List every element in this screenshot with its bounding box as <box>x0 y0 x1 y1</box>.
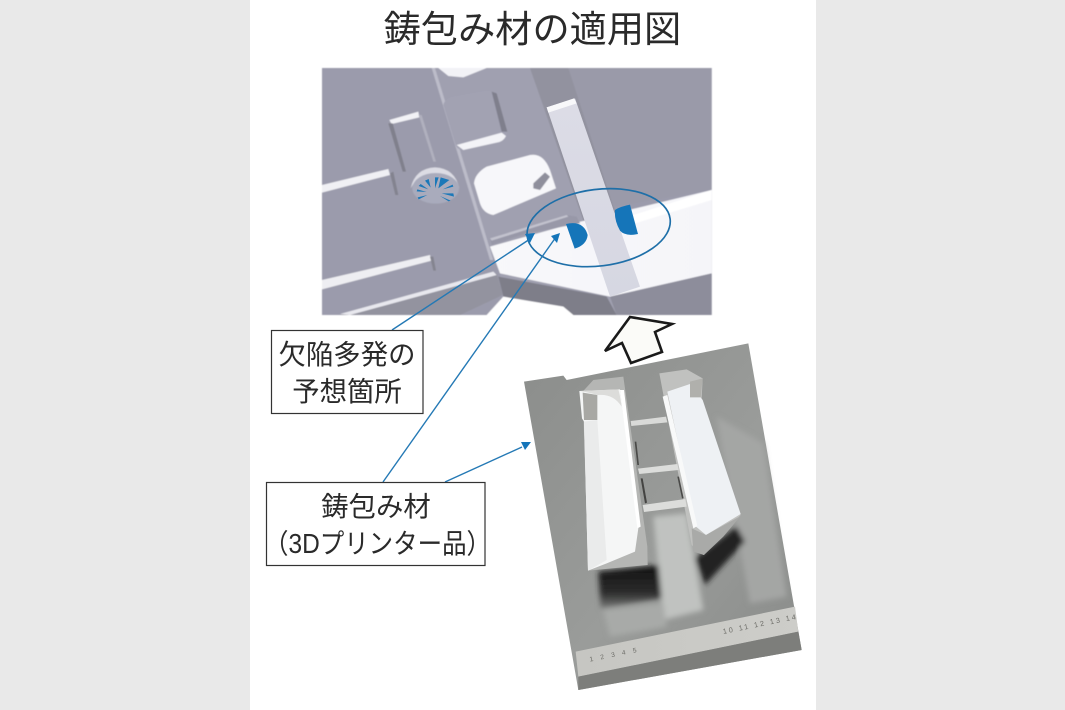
arrow: defect label to casting <box>392 233 535 330</box>
label: chill insert 3D printed: 鋳包み材 <box>321 491 431 522</box>
arrow: chill insert label to casting <box>383 233 560 482</box>
white page panel <box>250 0 816 710</box>
label: predicted defect location: 予想箇所 <box>292 376 402 407</box>
steel ruler: 10 11 12 13 14 <box>722 612 799 636</box>
photo: 3D printed chill inserts on steel plate <box>524 343 802 690</box>
label: predicted defect location <box>272 330 423 414</box>
main vertical strip <box>547 98 640 297</box>
steel ruler <box>576 607 802 690</box>
icon: blue defect area centre <box>566 223 588 249</box>
arrow: chill insert label to photo <box>445 442 531 482</box>
arrow: outlined up arrow <box>605 317 672 363</box>
panel: CAD view of casting <box>322 68 712 315</box>
ladder rungs <box>631 417 687 512</box>
icon: vent fan sectors <box>417 177 454 201</box>
label: chill insert 3D printed <box>264 482 491 566</box>
left insert <box>579 377 648 571</box>
plate highlights and shadows <box>598 417 787 637</box>
ellipse highlight <box>523 181 675 274</box>
title: 鋳包み材の適用図 <box>384 8 681 50</box>
right insert <box>659 369 741 555</box>
label: predicted defect location: 欠陥多発の <box>279 339 415 370</box>
steel plate <box>524 343 802 690</box>
icon: blue defect area right <box>615 205 638 235</box>
steel ruler: 12345 <box>589 646 644 664</box>
label: chill insert 3D printed: （3Dプリンター品） <box>264 528 491 559</box>
